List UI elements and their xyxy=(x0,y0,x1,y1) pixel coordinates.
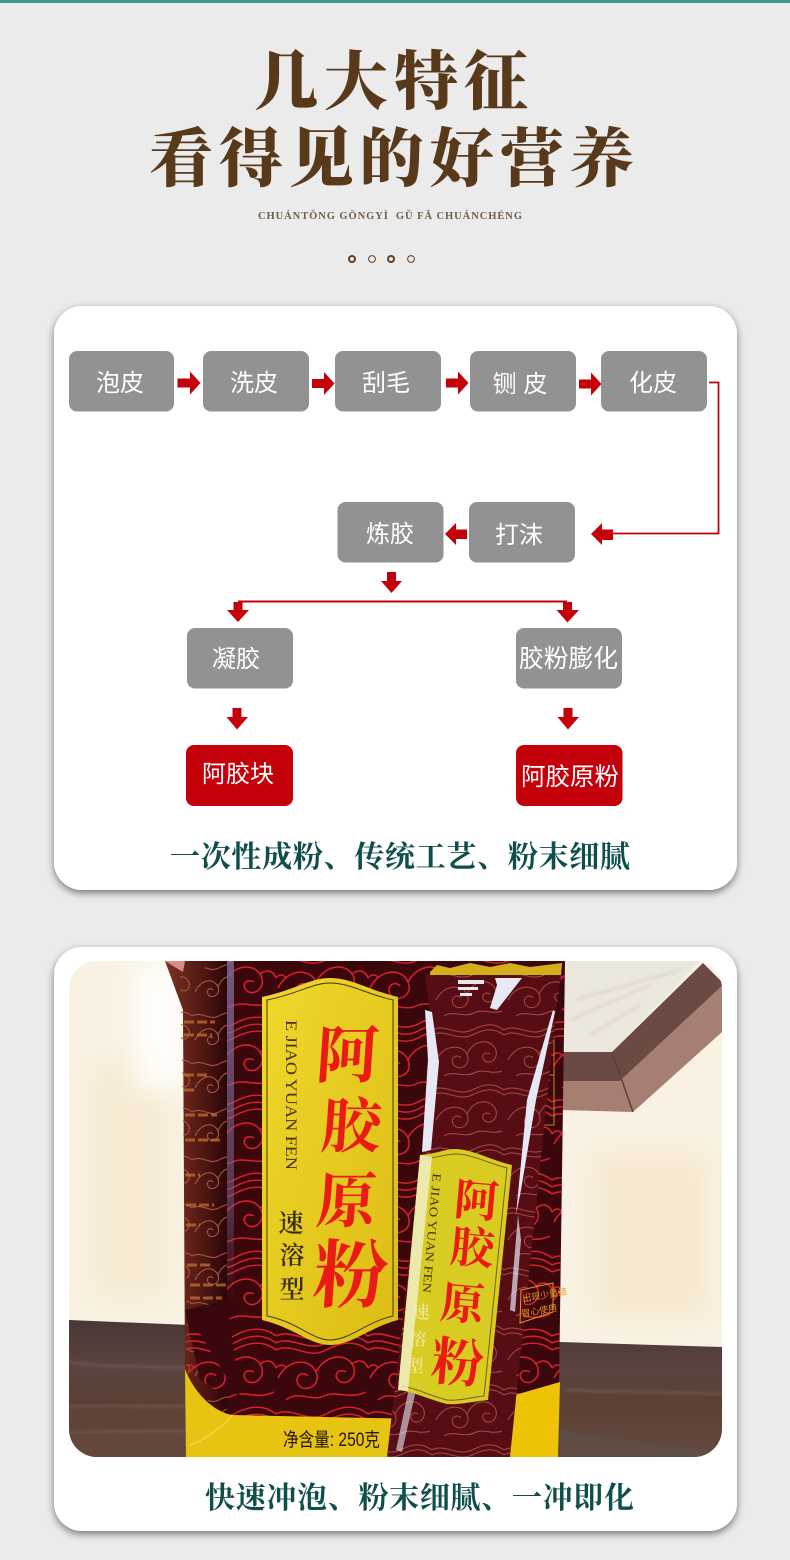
result boxes: 阿胶块 xyxy=(202,761,274,788)
product photo xyxy=(69,961,722,1460)
label title: 阿 xyxy=(314,1023,381,1091)
side note on can xyxy=(520,1283,568,1323)
title: 看得见的好营养 xyxy=(149,124,634,195)
label instant type: 型 xyxy=(279,1276,305,1304)
panel: process flow xyxy=(54,306,737,890)
top teal bar xyxy=(0,0,790,3)
panel: product photo xyxy=(54,947,737,1531)
result boxes: 阿胶原粉 xyxy=(521,763,619,791)
sachet title: 阿 xyxy=(452,1175,500,1228)
row 1 process steps: 刮毛 xyxy=(362,370,410,397)
title xyxy=(149,47,634,195)
side note on can: 出现少量结 xyxy=(521,1285,568,1304)
sachet highlights xyxy=(396,978,555,1452)
result boxes xyxy=(186,745,622,806)
sachet instant type: 溶 xyxy=(410,1330,426,1349)
branch arrows xyxy=(227,572,579,622)
row 1 arrows xyxy=(178,372,602,396)
label title: 粉 xyxy=(311,1236,391,1318)
sachet title xyxy=(429,1175,500,1395)
row 1 process steps: 泡皮 xyxy=(96,370,144,397)
label title xyxy=(311,1023,391,1318)
connector from 化皮 to 打沫 xyxy=(591,382,718,545)
sachet label xyxy=(398,1149,512,1404)
net weight text: 净含量: 250克 xyxy=(283,1429,380,1451)
row 1 process steps: 铡 皮 xyxy=(493,371,547,398)
label pinyin: E JIAO YUAN FEN xyxy=(282,1020,299,1170)
sachet instant type xyxy=(407,1303,429,1373)
decorative dots xyxy=(349,256,414,262)
label instant type: 速 xyxy=(278,1210,304,1238)
can yellow band xyxy=(185,1369,560,1457)
row 1 process steps: 化皮 xyxy=(629,370,677,397)
down arrows to results xyxy=(226,708,579,730)
sachet xyxy=(380,963,570,1460)
wall background xyxy=(69,961,722,1347)
arrow 打沫 to 炼胶 xyxy=(445,523,467,545)
can front face xyxy=(185,961,565,1457)
row 3 process steps: 凝胶 xyxy=(212,646,260,673)
picture frame xyxy=(560,961,722,1112)
can side face xyxy=(165,961,230,1440)
label instant type xyxy=(278,1210,305,1304)
caption two: 快速冲泡、粉末细腻、一冲即化 xyxy=(205,1482,634,1515)
sachet instant type: 型 xyxy=(406,1357,424,1376)
can label xyxy=(262,978,398,1345)
wooden shelf xyxy=(69,1320,722,1457)
row 2 process steps: 炼胶 xyxy=(366,521,414,548)
row 1 process steps xyxy=(69,351,707,412)
row 2 process steps: 打沫 xyxy=(495,522,543,549)
sachet title: 胶 xyxy=(448,1222,500,1275)
label title: 胶 xyxy=(319,1093,389,1160)
row 3 process steps: 胶粉膨化 xyxy=(519,645,618,673)
sachet pinyin: E JIAO YUAN FEN xyxy=(420,1173,444,1294)
pinyin subtitle: CHUÁNTŎNG GŌNGYÌ GŬ FĂ CHUÁNCHÉNG xyxy=(258,209,522,222)
caption one: 一次性成粉、传统工艺、粉末细腻 xyxy=(170,841,630,874)
row 1 process steps: 洗皮 xyxy=(230,370,278,397)
label title: 原 xyxy=(314,1168,382,1235)
label instant type: 溶 xyxy=(279,1242,305,1270)
row 3 process steps xyxy=(187,628,622,688)
title: 几大特征 xyxy=(254,47,528,118)
side note on can: 冒心使用 xyxy=(520,1302,558,1319)
sachet instant type: 速 xyxy=(412,1302,430,1322)
row 2 process steps xyxy=(338,502,575,562)
sachet title: 粉 xyxy=(429,1334,486,1395)
sachet title: 原 xyxy=(438,1278,488,1331)
